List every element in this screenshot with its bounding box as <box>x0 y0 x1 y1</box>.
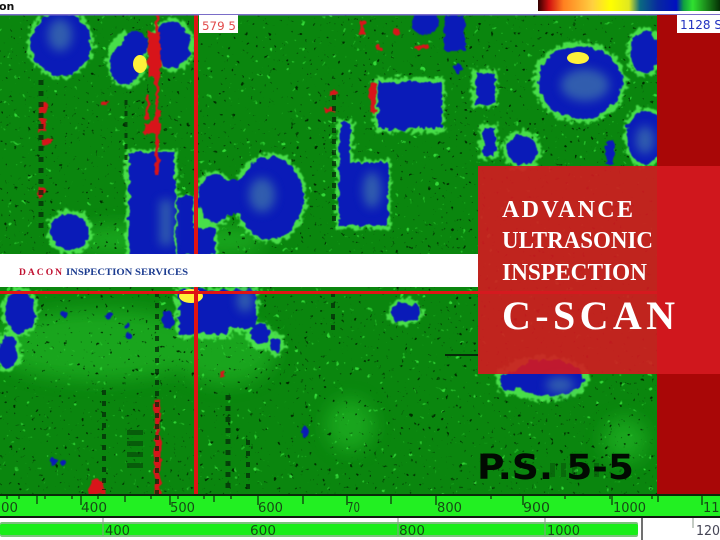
upper position ruler <box>0 494 720 518</box>
right dark red band <box>657 15 720 495</box>
ruler labels: 70 <box>347 501 360 516</box>
title line 1: ADVANCE <box>502 197 633 223</box>
translucent red title panel <box>478 166 720 374</box>
defect halos <box>0 13 664 398</box>
ruler labels: 1000 <box>613 501 646 516</box>
title text <box>502 197 675 338</box>
yellow hot spots <box>133 52 589 303</box>
navigation bar labels: 600 <box>250 524 276 539</box>
lighter defect cores <box>48 19 654 393</box>
short dark horizontal mark <box>445 354 478 356</box>
navigation bar labels: 1000 <box>547 524 580 539</box>
ruler labels: 11 <box>703 501 720 516</box>
ruler labels <box>1 501 720 516</box>
lower navigation bar <box>0 518 720 540</box>
red streak defects <box>38 15 427 495</box>
ruler ticks <box>7 496 702 505</box>
cursor value box left <box>199 15 238 33</box>
ruler labels: 600 <box>258 501 283 516</box>
title line 2: ULTRASONIC <box>502 228 653 254</box>
ruler labels: 800 <box>437 501 462 516</box>
cursor value box left: 579 5 <box>202 19 236 33</box>
title line 4: C-SCAN <box>502 293 675 338</box>
light green mottled zones <box>0 226 647 462</box>
blue defect areas <box>0 9 663 466</box>
ruler labels: 00 <box>1 501 18 516</box>
ruler labels: 400 <box>81 501 107 516</box>
top header line <box>0 14 720 16</box>
ruler labels: 900 <box>523 501 550 516</box>
colour scale bar <box>538 0 720 11</box>
navigation bar labels <box>105 524 720 539</box>
white subtitle band <box>0 254 478 287</box>
subtitle: DACON inspection services: DACON <box>19 268 62 278</box>
title line 3: INSPECTION <box>502 260 648 286</box>
dark label: P.S. 5-5: P.S. 5-5 <box>477 448 634 488</box>
navigation bar labels: 800 <box>399 524 425 539</box>
navigation bar labels: 400 <box>105 524 130 539</box>
subtitle: DACON inspection services: INSPECTION SERVICES <box>66 268 188 278</box>
ruler labels: 500 <box>170 501 195 516</box>
dark vertical scan streaks <box>41 80 600 495</box>
